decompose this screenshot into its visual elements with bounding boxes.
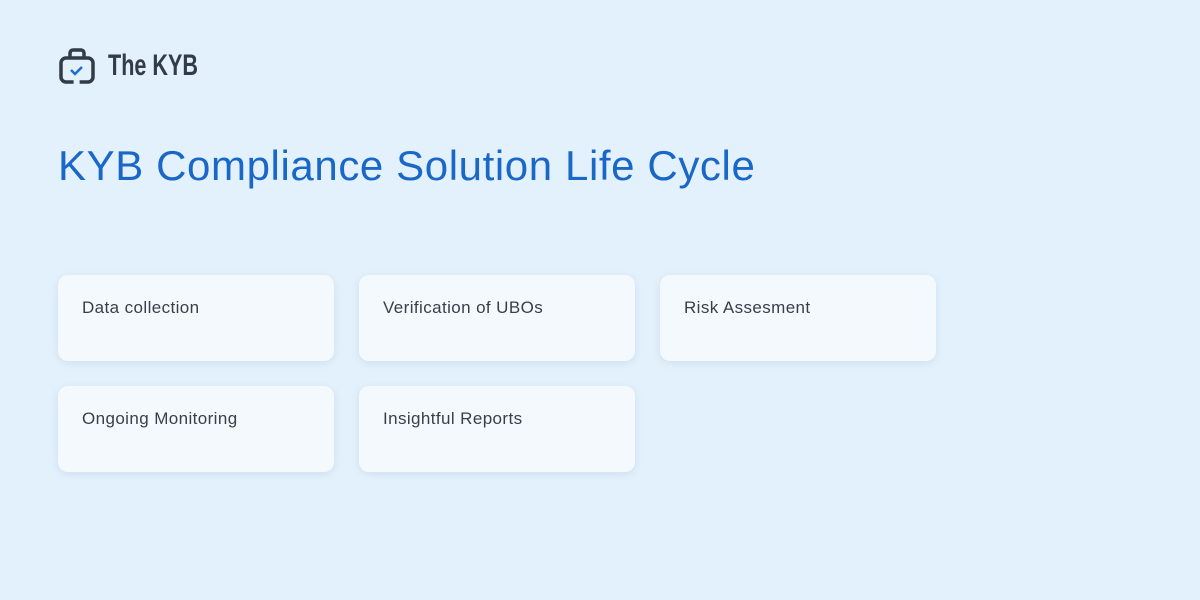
card: Insightful Reports: Insightful Reports — [383, 409, 522, 428]
card: Ongoing Monitoring — [58, 386, 334, 472]
title: KYB Compliance Solution Life Cycle — [58, 142, 755, 189]
card: Data collection — [58, 275, 334, 361]
logo — [59, 48, 198, 84]
card: Verification of UBOs — [359, 275, 635, 361]
card: Verification of UBOs: Verification of UBOs — [383, 298, 543, 317]
card: Ongoing Monitoring: Ongoing Monitoring — [82, 409, 238, 428]
card: Risk Assesment — [660, 275, 936, 361]
card: Risk Assesment: Risk Assesment — [684, 298, 811, 317]
card: Insightful Reports — [359, 386, 635, 472]
logo text: The KYB — [108, 49, 198, 82]
card: Data collection: Data collection — [82, 298, 200, 317]
icon: briefcase — [59, 48, 95, 84]
